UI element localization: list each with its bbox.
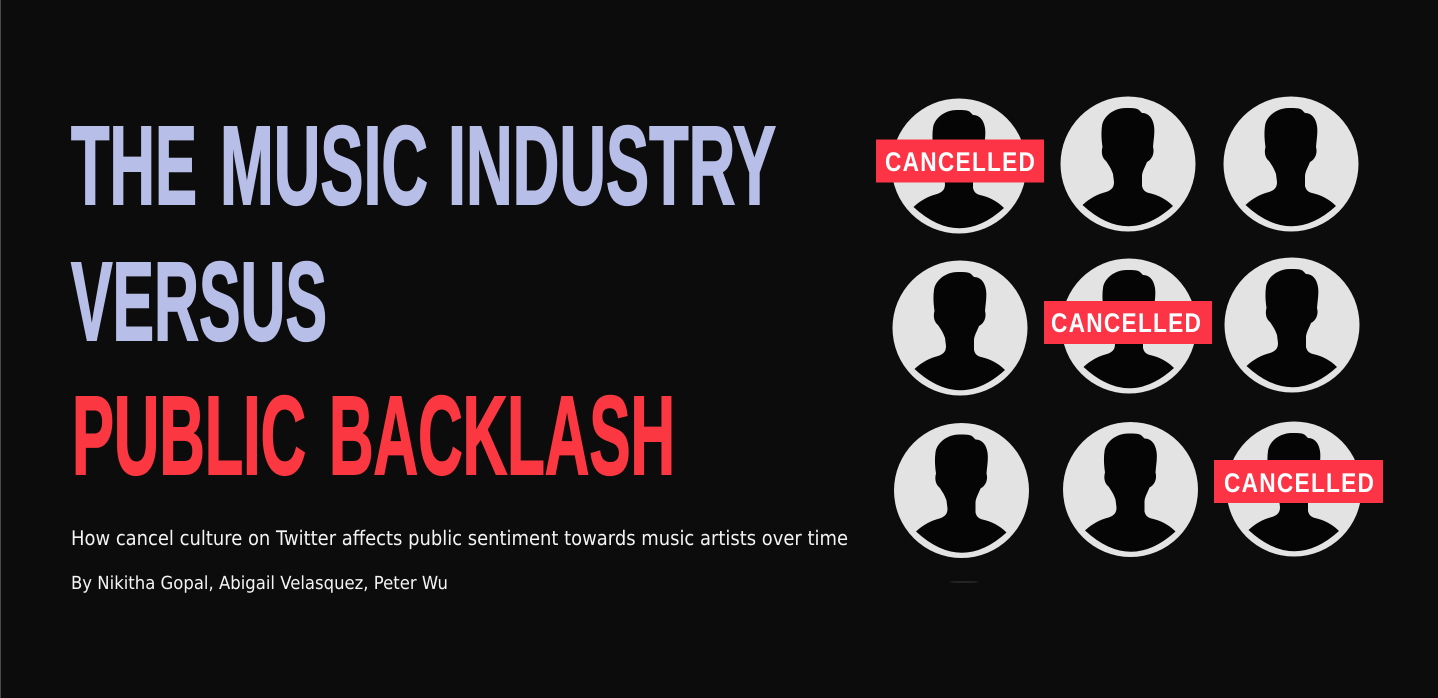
icon: person row 1 column 3 [1224,96,1358,232]
cancelled label 1 [876,140,1044,182]
title line: Public Backlash [72,373,675,498]
title [71,103,776,498]
title line: The Music Industry: MUSIC [220,103,428,228]
icon: person row 1 column 2 [1060,96,1196,232]
title line: Versus: VERSUS [71,239,327,364]
icon: person row 3 column 2 [1063,422,1198,557]
icon: person row 2 column 3 [1224,258,1360,392]
title line: The Music Industry [71,103,776,228]
icon: person row 1 column 1 [892,98,1026,234]
cancelled label 3 [1214,460,1383,503]
subtitle: How cancel culture on Twitter affects public sentiment towards music artists over time [71,526,848,550]
icon: person row 3 column 3 [1226,422,1362,556]
cancelled label 3: CANCELLED [1224,468,1375,498]
icon: person row 2 column 1 [892,260,1028,396]
title line: Public Backlash: BACKLASH [329,373,675,498]
authors: By Nikitha Gopal, Abigail Velasquez, Peter Wu [71,573,448,594]
cancelled label 2 [1044,301,1212,344]
title line: Public Backlash: PUBLIC [72,373,306,498]
cancelled label 1: CANCELLED [885,147,1036,177]
cancelled label 2: CANCELLED [1051,308,1202,338]
title line: The Music Industry: THE [71,103,197,228]
icon grid: silhouettes [892,96,1362,558]
icon: person row 3 column 1 [894,423,1029,558]
title line: The Music Industry: INDUSTRY [448,103,776,228]
icon: person row 2 column 2 [1062,258,1196,394]
